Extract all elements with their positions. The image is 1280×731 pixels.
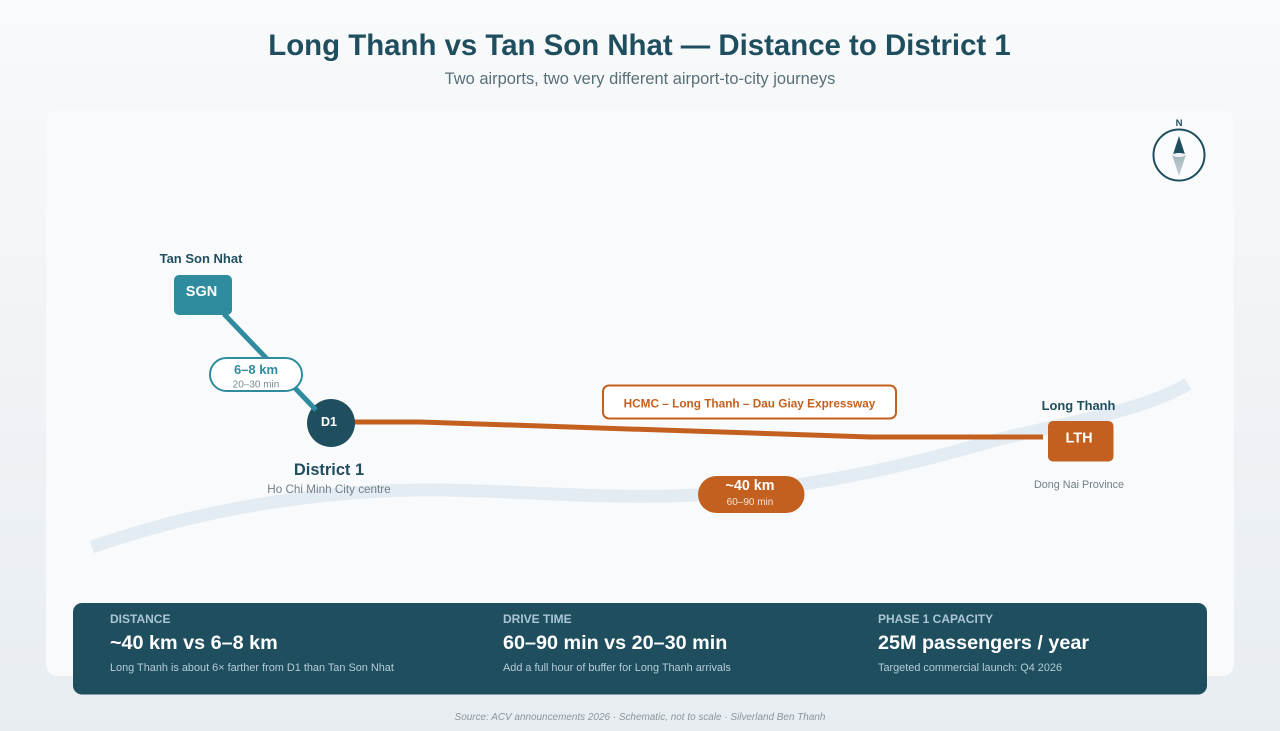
compass north label: N bbox=[1176, 118, 1183, 129]
panel: map bbox=[46, 110, 1234, 676]
airport: Long Thanh: LTH bbox=[1065, 430, 1093, 446]
route: District 1 to Long Thanh bbox=[350, 422, 1043, 437]
stat: drive time: 60–90 min vs 20–30 min bbox=[503, 632, 727, 654]
airport: Long Thanh: Dong Nai Province bbox=[1034, 479, 1124, 491]
airport: Tan Son Nhat: Tan Son Nhat bbox=[160, 251, 243, 266]
airport: Long Thanh bbox=[1034, 398, 1124, 491]
source note: Source: ACV announcements 2026 · Schematic, not to scale · Silverland Ben Thanh bbox=[455, 712, 826, 723]
label: expressway bbox=[603, 386, 896, 418]
stat: distance: ~40 km vs 6–8 km bbox=[110, 632, 278, 654]
airport: Tan Son Nhat bbox=[160, 251, 243, 315]
airport: Long Thanh: Long Thanh bbox=[1042, 398, 1115, 413]
stat: phase 1 capacity bbox=[878, 612, 1089, 674]
label: ~40 km pill: ~40 km bbox=[726, 478, 774, 494]
label: ~40 km pill: 60–90 min bbox=[727, 497, 773, 508]
stat: distance: Long Thanh is about 6× farther from D1 than Tan Son Nhat bbox=[110, 662, 394, 674]
route: SGN to District 1 bbox=[224, 314, 316, 410]
node: District 1: D1 bbox=[321, 415, 337, 429]
subtitle: Two airports, two very different airport-to-city journeys bbox=[445, 70, 835, 88]
label: 6–8 km pill: 6–8 km bbox=[234, 362, 278, 377]
stat: drive time: DRIVE TIME bbox=[503, 612, 572, 626]
river bbox=[92, 384, 1188, 547]
label: ~40 km pill bbox=[698, 476, 804, 513]
stat: distance: DISTANCE bbox=[110, 612, 170, 626]
label: 6–8 km pill: 20–30 min bbox=[233, 380, 279, 390]
stat: phase 1 capacity: 25M passengers / year bbox=[878, 632, 1089, 654]
node: District 1: District 1 bbox=[294, 461, 364, 479]
stat: phase 1 capacity: Targeted commercial launch: Q4 2026 bbox=[878, 662, 1062, 674]
airport: Tan Son Nhat: SGN bbox=[186, 284, 217, 300]
title: Long Thanh vs Tan Son Nhat — Distance to District 1 bbox=[268, 29, 1011, 62]
label: 6–8 km pill bbox=[210, 358, 302, 391]
stat: phase 1 capacity: PHASE 1 CAPACITY bbox=[878, 612, 993, 626]
stat: drive time: Add a full hour of buffer for Long Thanh arrivals bbox=[503, 662, 731, 674]
node: District 1 bbox=[267, 399, 391, 496]
panel: summary stats bbox=[73, 603, 1207, 694]
node: District 1: Ho Chi Minh City centre bbox=[267, 483, 391, 496]
stat: drive time bbox=[503, 612, 731, 674]
stat: distance bbox=[110, 612, 394, 674]
label: expressway: HCMC – Long Thanh – Dau Giay Expressway bbox=[624, 396, 876, 410]
compass bbox=[1154, 118, 1204, 180]
